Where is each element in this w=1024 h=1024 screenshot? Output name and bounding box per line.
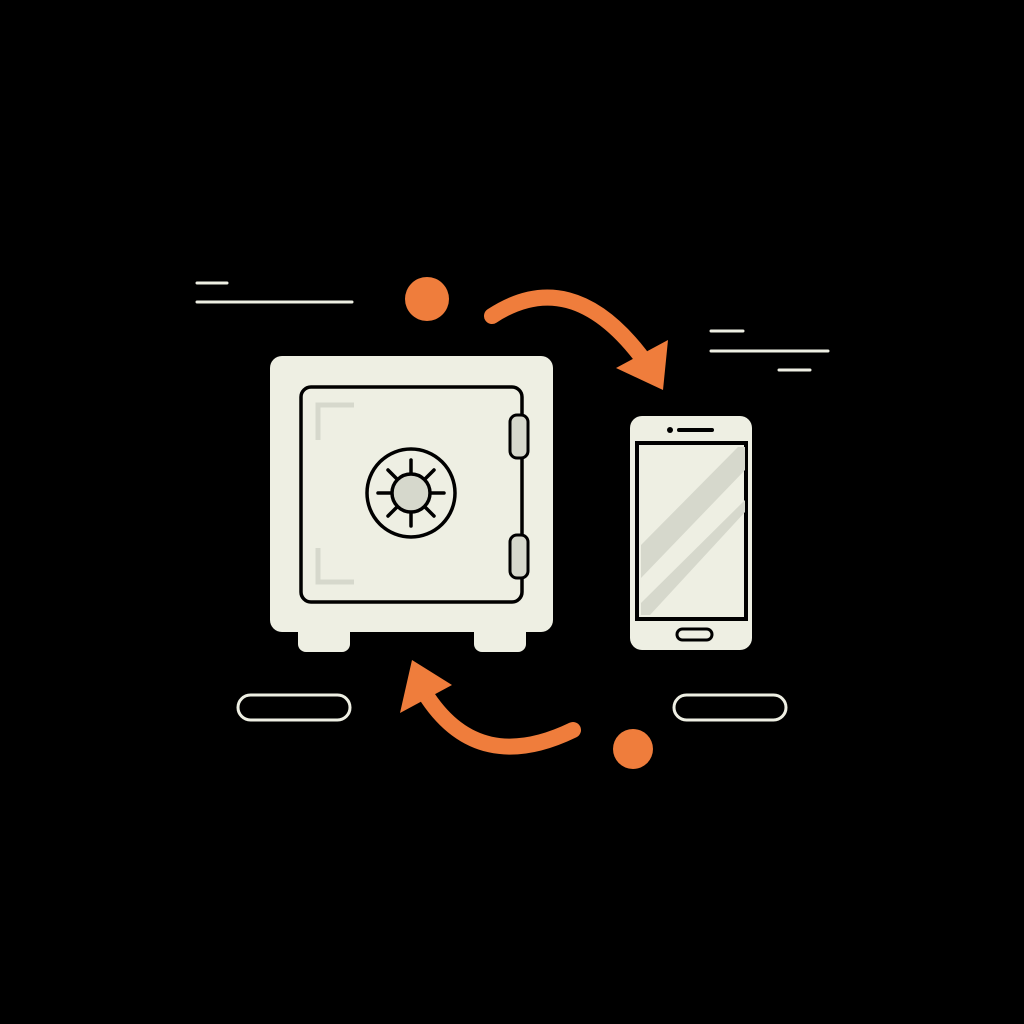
pill right [674, 695, 786, 720]
arrow: phone to safe [400, 660, 573, 747]
arrow: safe to phone [492, 298, 668, 390]
speed lines right [711, 331, 828, 370]
dot top [405, 277, 449, 321]
icon: safe [270, 356, 553, 652]
speed lines left [197, 283, 352, 302]
pill left [238, 695, 350, 720]
icon: phone [630, 416, 752, 650]
dot bottom [613, 729, 653, 769]
